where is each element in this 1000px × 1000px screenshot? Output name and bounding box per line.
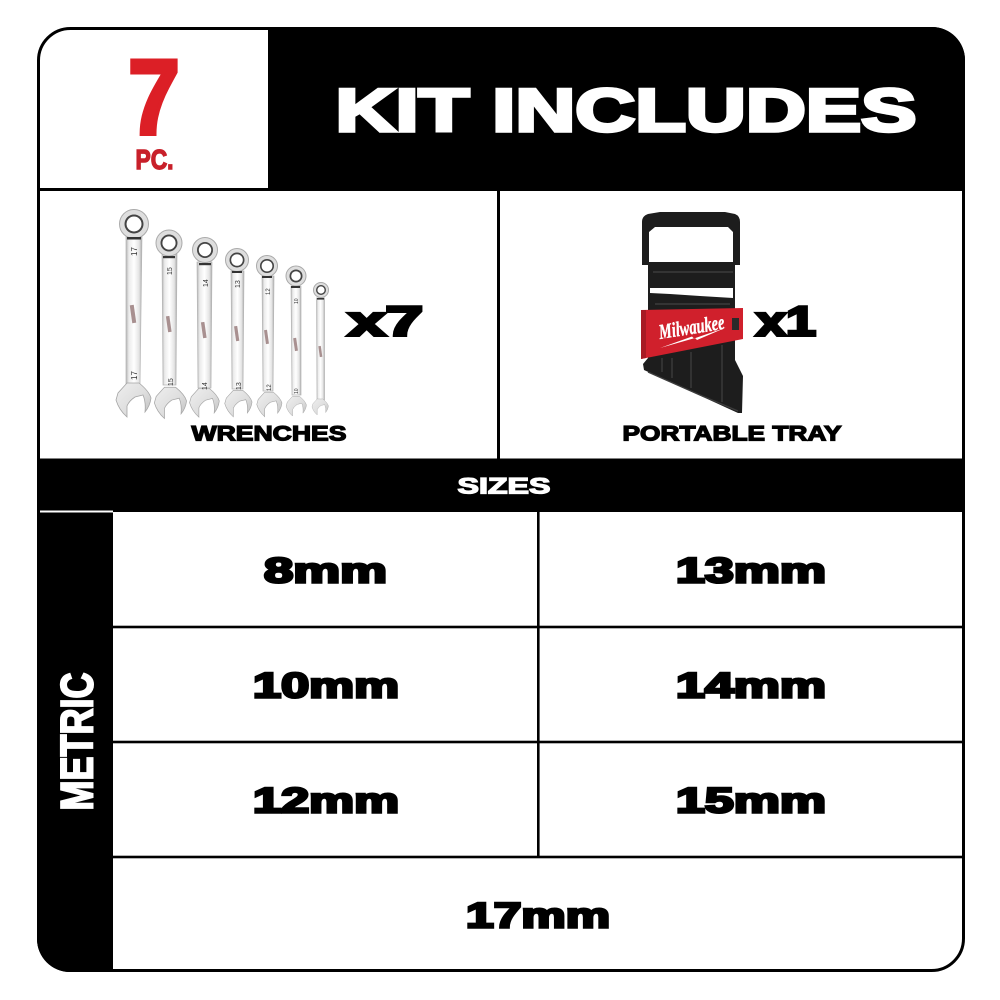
big seven: 7 xyxy=(128,37,180,157)
wrench 17: 17 xyxy=(130,247,139,256)
title: KIT INCLUDES xyxy=(336,77,916,144)
wrench 10: 10 xyxy=(294,388,300,394)
wrench set image xyxy=(116,210,328,418)
quantity x1: x1 xyxy=(756,298,816,344)
panel divider xyxy=(497,190,500,460)
size 8mm: 8mm xyxy=(264,552,387,590)
tray body xyxy=(642,212,743,413)
size 10mm: 10mm xyxy=(253,666,399,706)
sizes heading: SIZES xyxy=(458,474,550,498)
wrench 13: 13 xyxy=(235,280,242,288)
wrench 12: 12 xyxy=(266,288,272,295)
size 12mm: 12mm xyxy=(253,782,399,820)
wrench 10 xyxy=(286,266,306,416)
wrench 12: 12 xyxy=(267,384,273,391)
wrench 10: 10 xyxy=(294,298,300,304)
wrench 17: 17 xyxy=(130,371,139,380)
tray ribs xyxy=(648,272,738,411)
sizes band xyxy=(37,458,965,512)
wrench 14: 14 xyxy=(203,279,210,287)
brand name: Milwaukee xyxy=(656,310,726,344)
wrench 8 xyxy=(312,282,328,415)
wrench 14 xyxy=(190,238,219,417)
wrench 13 xyxy=(225,248,252,417)
quantity x7: x7 xyxy=(348,298,423,344)
size 15mm: 15mm xyxy=(676,782,826,820)
metric column xyxy=(37,510,113,972)
tray image xyxy=(641,212,743,413)
size 17mm: 17mm xyxy=(466,896,610,936)
wrench 15: 15 xyxy=(168,378,175,386)
lightning bolt xyxy=(660,328,726,348)
tray label: PORTABLE TRAY xyxy=(622,422,842,446)
wrench 15 xyxy=(154,230,187,418)
size 13mm: 13mm xyxy=(676,552,826,590)
header black block xyxy=(268,27,965,190)
table grid xyxy=(113,512,964,858)
metric label: METRIC xyxy=(52,672,102,810)
size values xyxy=(253,552,826,936)
piece count xyxy=(128,37,180,175)
size 14mm: 14mm xyxy=(676,666,826,706)
wrench 17 xyxy=(116,210,151,417)
tray white slot xyxy=(650,288,733,298)
wrench 13: 13 xyxy=(236,382,243,390)
wrench 12 xyxy=(256,256,282,417)
wrenches label: WRENCHES xyxy=(192,422,346,446)
panel: portable tray xyxy=(622,212,842,446)
header band xyxy=(268,27,965,190)
wrench 15: 15 xyxy=(167,267,174,275)
pc label: PC. xyxy=(136,144,174,175)
header divider xyxy=(38,188,964,191)
panel: wrenches xyxy=(116,210,423,446)
tray red sleeve xyxy=(641,308,743,359)
wrench 14: 14 xyxy=(202,382,209,390)
sleeve clip xyxy=(732,318,739,330)
